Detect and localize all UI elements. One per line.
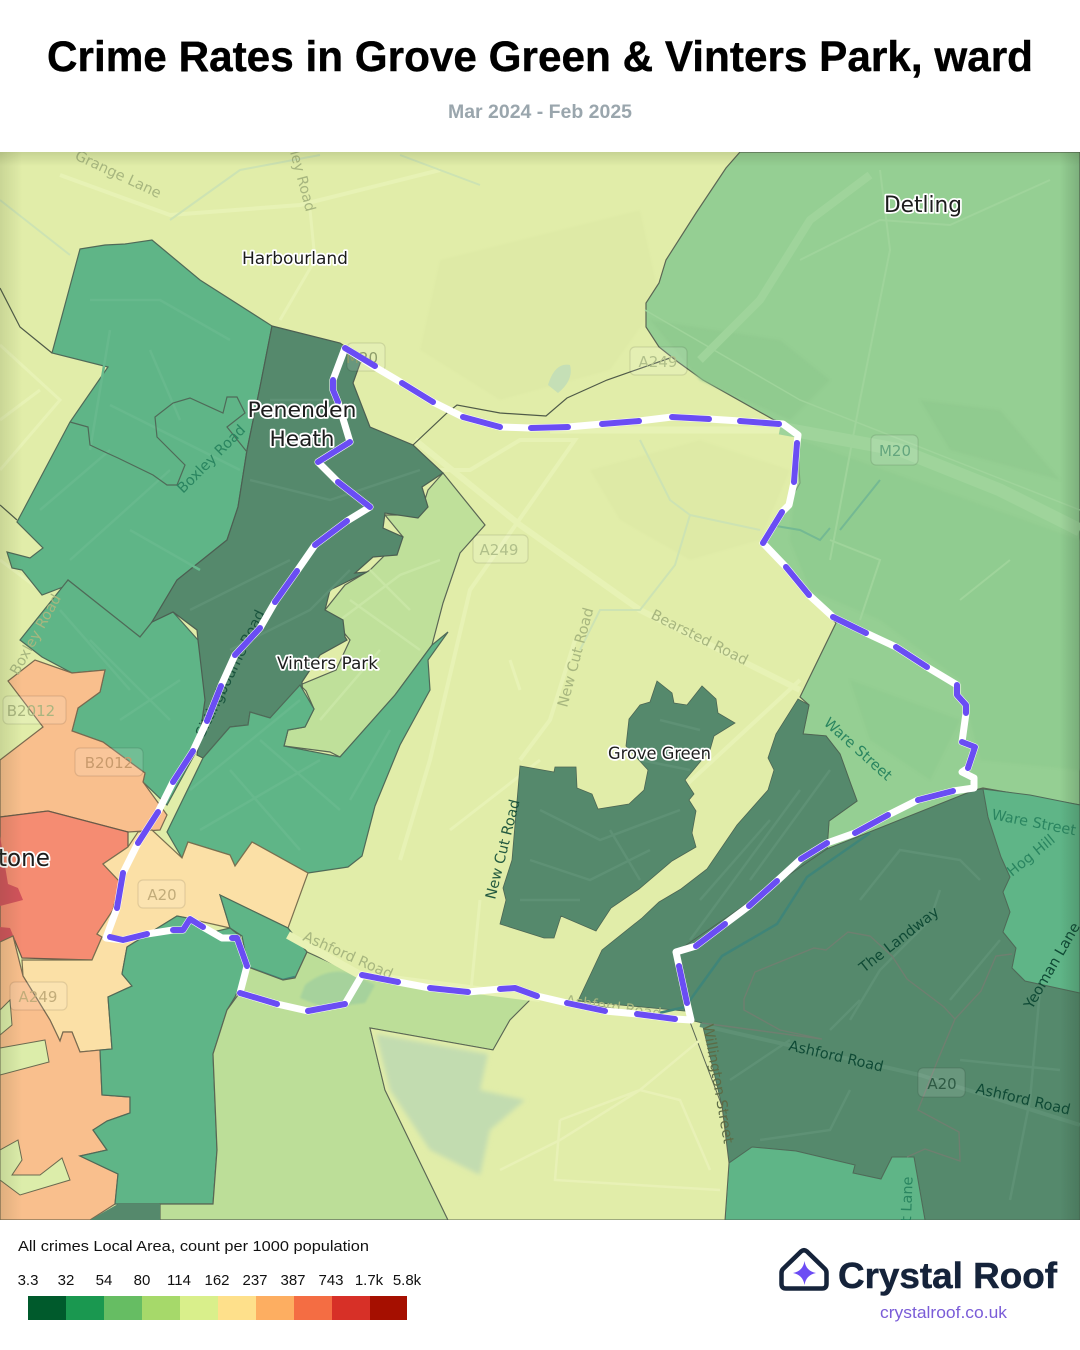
map: Detling darker fields [691, 371, 1080, 770]
road shields: M20 [879, 442, 911, 460]
ward boundary: white base line [106, 348, 975, 1020]
map: pale inclusions in orange [0, 1000, 70, 1195]
legend scale values: 237 [242, 1272, 268, 1289]
road names: t Lane [899, 1176, 917, 1222]
legend scale values [18, 1272, 422, 1289]
road names: Grange Lane [72, 148, 164, 202]
region: Ware Street band (dark green) [578, 699, 857, 1011]
choropleth map [0, 148, 1080, 1222]
legend scale values: 3.3 [18, 1272, 38, 1289]
place names: Heath [270, 427, 334, 451]
place names: Harbourland [242, 249, 348, 269]
map: teal riverbank by Ashford Road [250, 968, 295, 980]
map: Ashford Road band [288, 935, 540, 998]
region: A20 pale orange [22, 830, 308, 1052]
map: streams on base [0, 155, 760, 650]
map: roads on dark green [190, 400, 1080, 1200]
map: field patches [420, 210, 790, 560]
road shields: A249 [639, 353, 677, 371]
legend scale values: 80 [134, 1272, 150, 1289]
region: Detling ward (light green) [646, 152, 1080, 849]
region: Maidstone south orange [0, 936, 130, 1220]
map: Harbourland pond [548, 365, 571, 393]
map: roads on mid green [100, 365, 200, 571]
region: dark green south tip [90, 1204, 160, 1220]
logo wordmark: Crystal Roof [838, 1255, 1058, 1296]
road names: Ashford Road [974, 1081, 1072, 1119]
region: small green by Ashford Road [220, 895, 307, 980]
place names: Vinters Park [277, 654, 378, 674]
road shields: A249 [480, 541, 518, 559]
road names: Boxley Road [8, 592, 65, 678]
map: Vinters Park roads [320, 560, 440, 720]
place names [0, 193, 962, 872]
road names: Ashford Road [787, 1038, 885, 1076]
map: yellow south of Ashford Road [370, 995, 729, 1220]
region: Boxley Road ward (mid green) [7, 240, 272, 637]
map: north-west boundary lines [0, 288, 52, 520]
road shields: A20 [927, 1075, 957, 1093]
road names: Boxley Road [175, 422, 249, 497]
legend [18, 1238, 422, 1320]
title: Crime Rates in Grove Green & Vinters Park, ward [47, 33, 1033, 81]
region: Grove Green ward (dark green) [500, 681, 735, 938]
road shields: A249 [19, 988, 57, 1006]
legend scale values: 32 [58, 1272, 74, 1289]
region: deep red cells [0, 836, 23, 942]
road names: New Cut Road [555, 606, 597, 709]
region: Vinters Park ward (light green) [284, 473, 485, 757]
legend scale values: 1.7k [355, 1272, 384, 1289]
region: Sittingbourne Road west ward (mid green) [20, 580, 213, 805]
road names: Sittingbourne Road [193, 608, 269, 740]
map: stream in Detling [770, 480, 880, 540]
website url: crystalroof.co.uk [880, 1304, 1008, 1322]
icon: house outline [782, 1250, 826, 1288]
road names: Willington Street [699, 1023, 736, 1145]
legend scale values: 5.8k [393, 1272, 422, 1289]
region: Mote Park light green [160, 952, 535, 1220]
map: river Len [659, 833, 870, 1013]
road shields: A20 [147, 886, 177, 904]
legend scale values: 162 [204, 1272, 230, 1289]
map: M20 motorway corridor [645, 170, 1080, 620]
legend scale values: 114 [167, 1272, 191, 1289]
road names: New Cut Road [483, 798, 524, 901]
map: lake on yellow [376, 1034, 525, 1175]
place names: Grove Green [608, 744, 711, 764]
map edge shading [0, 152, 1080, 1220]
logo: Crystal Roof [782, 1250, 1058, 1322]
ward boundary: purple dashes [110, 348, 975, 1019]
map: ward line north of bypass [413, 358, 670, 445]
road shields: B2012 [7, 702, 55, 720]
region: south-east Vinters mid green [167, 632, 448, 873]
road shields: M20 [346, 349, 378, 367]
road names: Ashford Road [564, 993, 662, 1022]
legend scale values: 743 [318, 1272, 344, 1289]
road names: Bearsted Road [648, 607, 750, 669]
region: Maidstone town centre red [0, 811, 128, 960]
road shields: B2012 [85, 754, 133, 772]
legend title: All crimes Local Area, count per 1000 population [18, 1238, 369, 1255]
road names: Ware Street [820, 715, 895, 784]
region: south-east ward (dark green) [676, 789, 1080, 1220]
region: Maidstone north orange [0, 660, 167, 832]
map: Boxley inner boundary [70, 397, 247, 485]
place names: Detling [884, 193, 962, 218]
map: minor roads on base [0, 170, 800, 1000]
road names: ley Road [286, 149, 318, 213]
region: Ware Street east ward (mid green) [983, 789, 1080, 993]
road names [8, 148, 1080, 1222]
icon: purple star [793, 1261, 816, 1285]
subtitle: date range: Mar 2024 - Feb 2025 [448, 102, 632, 123]
region: south mid green strip [725, 1147, 925, 1220]
region: south mid green [80, 916, 248, 1204]
map: south yellow lanes [500, 1040, 720, 1190]
road names: Ashford Road [300, 929, 395, 983]
legend scale values: 54 [96, 1272, 112, 1289]
road shields [3, 343, 965, 1097]
place names: Penenden [248, 398, 356, 422]
map: SE inner boundary [702, 932, 1012, 1161]
legend colour bar [28, 1296, 407, 1320]
legend scale values: 387 [280, 1272, 306, 1289]
road names: Hog Hill [1004, 832, 1058, 880]
road names: Ware Street [990, 807, 1078, 839]
road names: The Landway [856, 904, 943, 977]
map: upper lake [300, 972, 375, 1008]
region: Penenden Heath ward (dark green) [152, 326, 443, 758]
